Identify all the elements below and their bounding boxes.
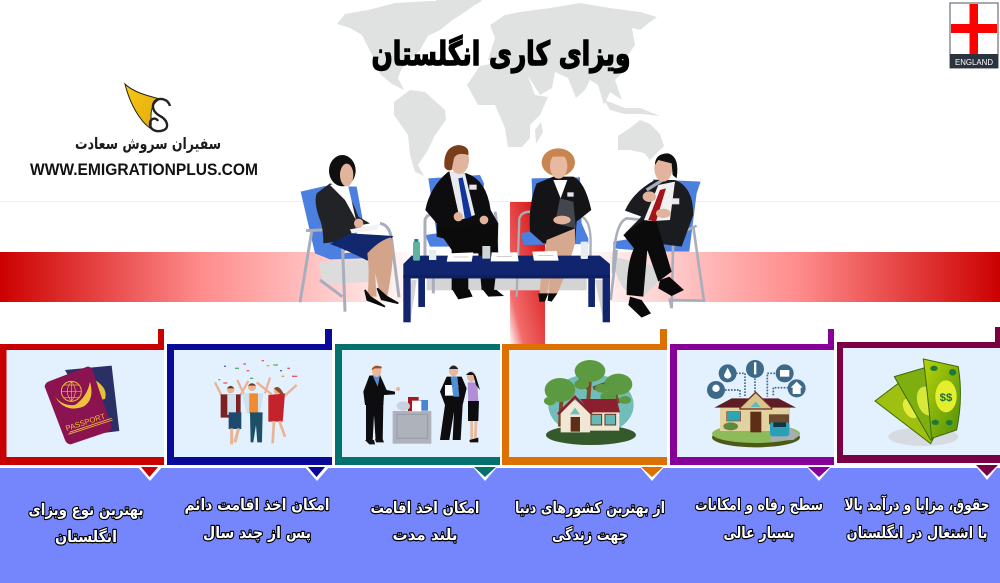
- icon: house with trees: [544, 360, 636, 445]
- panel: long-term residence (teal): [335, 344, 500, 481]
- caption: permanent residence: [184, 496, 330, 543]
- red band right: [580, 252, 1000, 302]
- logo Persian name: سفیران سروش سعادت: [75, 134, 221, 153]
- caption: salary: [844, 495, 990, 542]
- man with microphone: [611, 153, 704, 318]
- icon: celebrating people: [215, 360, 297, 444]
- icon: money bills: $$: [940, 392, 953, 404]
- caption: best countries: جهت زندگی: [552, 525, 628, 544]
- caption: long-term residence: امکان اخذ اقامت: [370, 499, 480, 517]
- title: ویزای کاری انگلستان: [372, 34, 630, 74]
- faint guide lines: [0, 201, 1000, 202]
- panel: best countries (orange): [502, 329, 667, 481]
- man with blue tie: [425, 145, 504, 299]
- logo URL: WWW.EMIGRATIONPLUS.COM: [30, 160, 258, 179]
- icon: passports: [45, 366, 119, 444]
- icon: smart house: [707, 360, 806, 447]
- icon: swan S: [150, 99, 170, 131]
- caption: best visa: [28, 501, 144, 546]
- panel: salary (maroon): [837, 327, 1000, 480]
- woman with auburn hair: [517, 148, 591, 302]
- icon: office meeting: [363, 365, 480, 444]
- woman on left chair: [300, 155, 399, 312]
- flag: England: [950, 3, 998, 68]
- flag: England: ENGLAND: [955, 57, 993, 67]
- caption: long-term residence: [370, 499, 480, 544]
- illustration: panel discussion: [300, 145, 704, 322]
- logo: [30, 84, 258, 179]
- table shadow: [403, 278, 610, 320]
- caption: best visa: بهترین نوع ویزای: [28, 501, 144, 519]
- caption: permanent residence: پس از چند سال: [203, 524, 311, 543]
- red vertical bar: [510, 202, 545, 345]
- caption: welfare: سطح رفاه و امکانات: [695, 496, 823, 514]
- caption: welfare: بسیار عالی: [724, 524, 794, 542]
- caption: best visa: انگلستان: [55, 527, 117, 546]
- panel: lower blue background: [0, 468, 1000, 583]
- panel: welfare (purple): [670, 329, 834, 481]
- caption: welfare: [695, 496, 823, 542]
- panel: permanent residence (blue): [167, 329, 332, 481]
- icon: money bills: [875, 359, 960, 446]
- table with papers and bottles: [403, 239, 610, 322]
- caption: permanent residence: امکان اخذ اقامت دائم: [184, 496, 330, 514]
- panel: best visa (red): [0, 329, 164, 481]
- caption: long-term residence: بلند مدت: [392, 526, 458, 544]
- world map background: [337, 0, 664, 176]
- icon: gold wing: [125, 84, 160, 128]
- caption: best countries: از بهترین کشورهای دنیا: [515, 499, 665, 517]
- icon: passports: PASSPORT: [64, 412, 107, 433]
- red band left: [0, 252, 420, 302]
- caption: best countries: [515, 499, 665, 544]
